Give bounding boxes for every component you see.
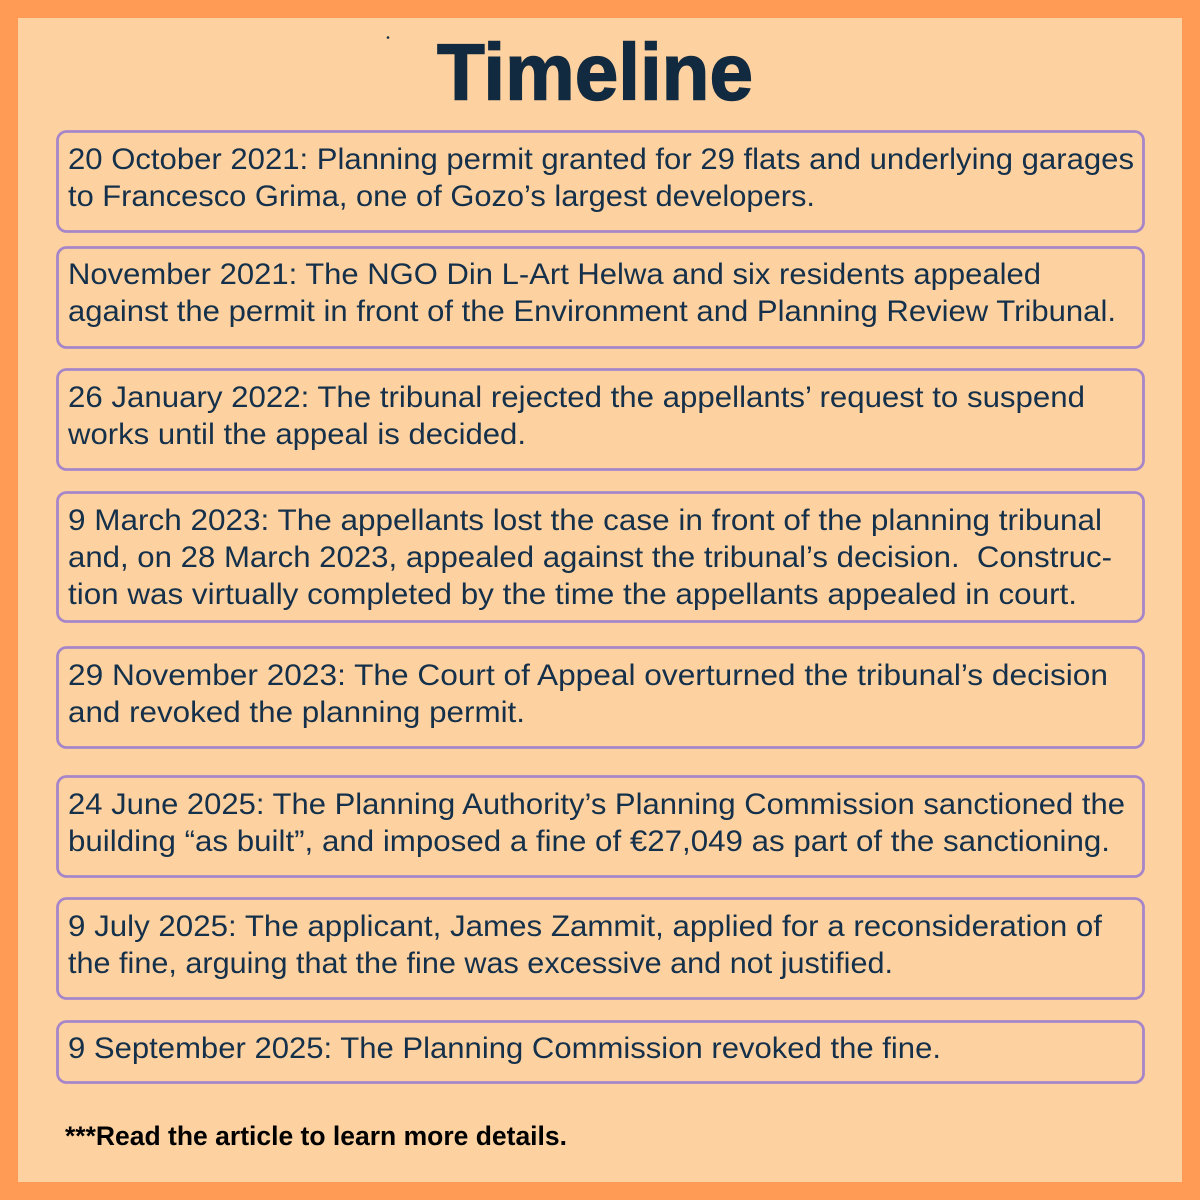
timeline entry: 29 November 2023: 29 November 2023: The Court of Appeal overturned the tribunal’s decision (68, 659, 1108, 692)
timeline entry: 20 October 2021 (58, 132, 1144, 232)
timeline entry: 26 January 2022: works until the appeal is decided. (67, 418, 526, 451)
decorative speck (387, 36, 389, 39)
timeline entry: 9 September 2025: 9 September 2025: The Planning Commission revoked the fine. (68, 1032, 941, 1065)
timeline entry: 9 March 2023: 9 March 2023: The appellants lost the case in front of the planning tribunal (68, 504, 1102, 537)
timeline entry: November 2021 (58, 248, 1144, 348)
timeline entry: 29 November 2023 (58, 648, 1144, 748)
timeline entry: 9 July 2025: the fine, arguing that the fine was excessive and not justified. (68, 947, 893, 980)
timeline entry: November 2021: November 2021: The NGO Din L-Art Helwa and six residents appealed (68, 258, 1041, 291)
title: Timeline (437, 28, 753, 116)
timeline entry: 26 January 2022 (58, 370, 1144, 470)
timeline entry: 9 March 2023: and, on 28 March 2023, appealed against the tribunal’s decision. Construc- (68, 541, 1112, 574)
timeline entry: 24 June 2025 (58, 776, 1144, 876)
timeline entry: 29 November 2023: and revoked the planning permit. (68, 696, 525, 729)
timeline entry: 9 March 2023 (58, 492, 1144, 622)
timeline entry: 24 June 2025: 24 June 2025: The Planning Authority’s Planning Commission sanctioned the (68, 788, 1125, 821)
timeline entry: 9 September 2025 (58, 1022, 1144, 1082)
timeline entry: 9 July 2025: 9 July 2025: The applicant, James Zammit, applied for a reconsideration of (68, 910, 1103, 943)
timeline entry: November 2021: against the permit in front of the Environment and Planning Review Tribunal. (68, 295, 1116, 328)
timeline entry: 24 June 2025: building “as built”, and imposed a fine of €27,049 as part of the sanctioning. (68, 825, 1110, 858)
timeline entry: 20 October 2021: to Francesco Grima, one of Gozo’s largest developers. (68, 180, 815, 213)
timeline entry: 26 January 2022: 26 January 2022: The tribunal rejected the appellants’ request to suspend (68, 381, 1085, 414)
footer note: ***Read the article to learn more details. (65, 1121, 567, 1151)
timeline entry: 9 July 2025 (58, 898, 1144, 998)
timeline entry: 9 March 2023: tion was virtually completed by the time the appellants appealed in court. (68, 578, 1077, 611)
timeline entry: 20 October 2021: 20 October 2021: Planning permit granted for 29 flats and underlying garages (68, 143, 1134, 176)
